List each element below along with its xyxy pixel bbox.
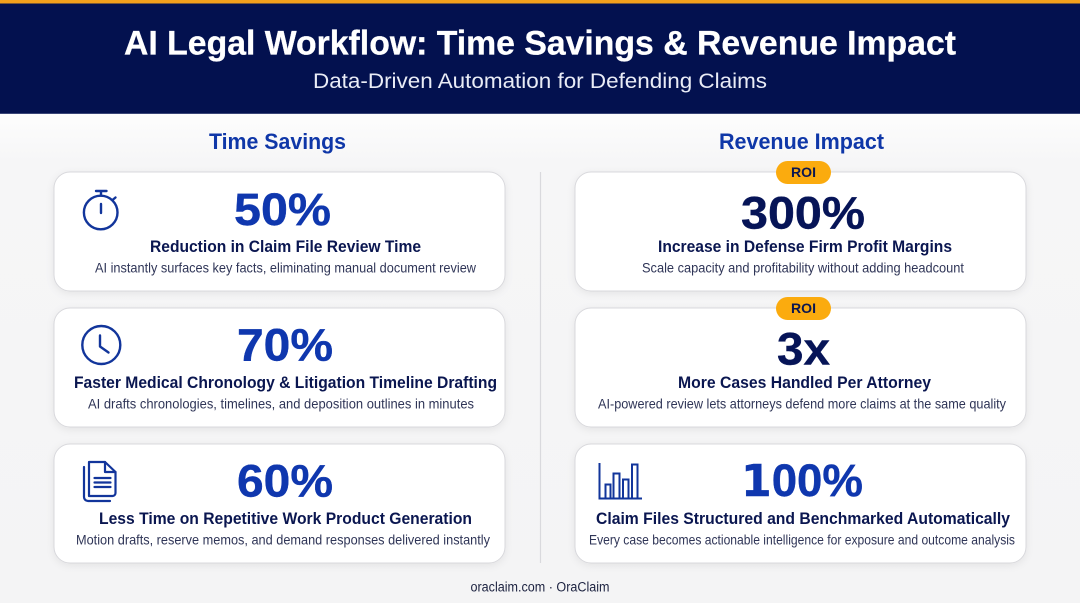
panel: medical chronology <box>54 308 505 427</box>
stat: 300%: 300% <box>741 188 865 238</box>
panel: claim file review <box>54 172 505 291</box>
card heading: Reduction in Claim File Review Time <box>150 238 421 256</box>
card heading: Less Time on Repetitive Work Product Generation <box>99 510 472 528</box>
title: AI Legal Workflow: Time Savings & Revenue Impact <box>124 24 956 62</box>
icon: clock <box>82 326 120 364</box>
card description: AI drafts chronologies, timelines, and deposition outlines in minutes <box>88 396 474 412</box>
subtitle: Data-Driven Automation for Defending Claims <box>313 69 767 93</box>
icon: document <box>84 462 116 501</box>
card heading: Claim Files Structured and Benchmarked Automatically <box>596 510 1011 528</box>
stat: 50%: 50% <box>234 184 331 235</box>
badge: ROI: ROI <box>791 164 816 180</box>
header banner <box>0 0 1080 114</box>
card description: AI instantly surfaces key facts, eliminating manual document review <box>95 260 477 276</box>
icon: bar chart <box>600 463 642 498</box>
panel: structured claim files <box>575 444 1026 563</box>
card heading: More Cases Handled Per Attorney <box>678 374 932 392</box>
panel: cases per attorney <box>575 297 1026 427</box>
stat: 70%: 70% <box>237 320 333 370</box>
panel: repetitive work <box>54 444 505 563</box>
badge: ROI <box>776 297 831 320</box>
icon: stopwatch <box>84 191 117 229</box>
heading: time savings: Time Savings <box>209 129 346 154</box>
card description: Scale capacity and profitability without adding headcount <box>642 260 964 276</box>
badge: ROI: ROI <box>791 300 816 316</box>
heading: revenue impact: Revenue Impact <box>719 129 885 154</box>
stat: 100%: 100% <box>741 455 863 507</box>
card description: Every case becomes actionable intelligence for exposure and outcome analysis <box>589 532 1015 548</box>
card description: AI-powered review lets attorneys defend more claims at the same quality <box>598 396 1006 412</box>
panel: profit margins <box>575 161 1026 291</box>
card heading: Increase in Defense Firm Profit Margins <box>658 238 952 256</box>
card description: Motion drafts, reserve memos, and demand responses delivered instantly <box>76 532 490 548</box>
footer: oraclaim.com · OraClaim <box>470 580 610 594</box>
stat: 3x: 3x <box>777 324 830 374</box>
badge: ROI <box>776 161 831 184</box>
card heading: Faster Medical Chronology & Litigation Timeline Drafting <box>74 374 497 392</box>
stat: 60%: 60% <box>237 456 333 506</box>
